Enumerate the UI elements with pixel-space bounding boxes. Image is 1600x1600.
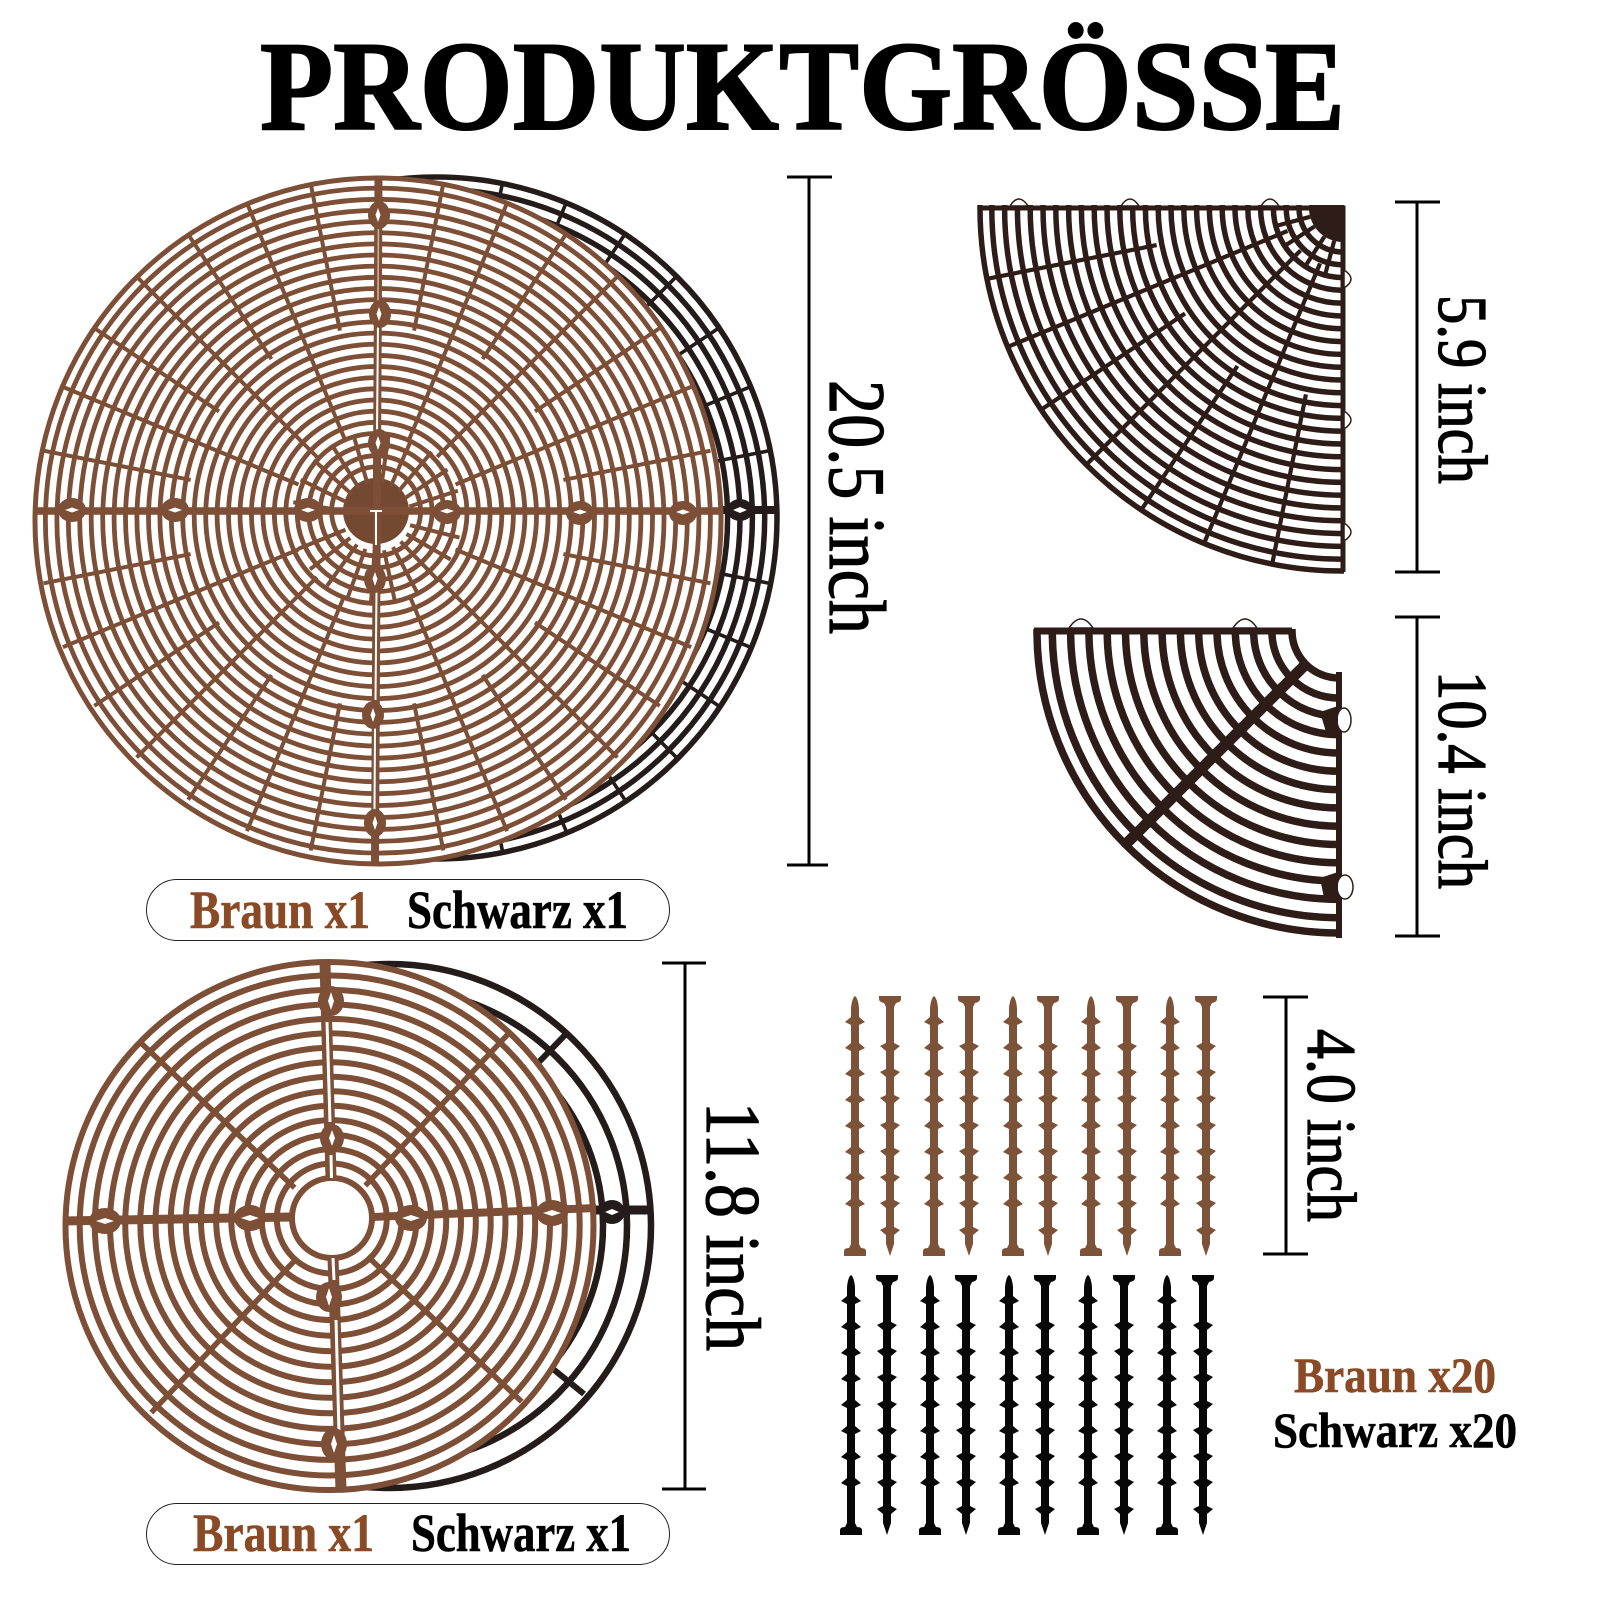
black stakes bbox=[840, 1275, 1214, 1535]
brown small disc spokes bbox=[140, 1031, 522, 1413]
pill: small disc quantities: Braun x1 bbox=[193, 1503, 374, 1563]
tabs of wide corner piece bbox=[1069, 619, 1353, 904]
stake quantities: Braun x20 bbox=[1294, 1347, 1496, 1403]
panel: corner piece with fine grid bbox=[977, 198, 1352, 574]
dimension: 4.0 inch bbox=[1263, 997, 1369, 1254]
dimension: 4.0 inch: 4.0 inch bbox=[1292, 1029, 1369, 1222]
pill: small disc quantities: Schwarz x1 bbox=[411, 1503, 631, 1563]
black small disc bbox=[127, 964, 653, 1488]
dimension: 20.5 inch: 20.5 inch bbox=[812, 380, 900, 634]
dimension: 10.4 inch: 10.4 inch bbox=[1423, 671, 1500, 889]
brown large disc spokes bbox=[44, 184, 710, 850]
dimension: 11.8 inch bbox=[662, 963, 776, 1489]
dimension: 5.9 inch: 5.9 inch bbox=[1423, 295, 1500, 484]
dimension: 5.9 inch bbox=[1395, 202, 1500, 572]
pill: large disc quantities bbox=[146, 880, 670, 940]
brown small disc bbox=[63, 961, 596, 1491]
stake quantities: Schwarz x20 bbox=[1273, 1402, 1517, 1458]
brown large disc bbox=[34, 177, 723, 865]
panel: corner piece with wide grid bbox=[1033, 618, 1354, 938]
dimension: 11.8 inch: 11.8 inch bbox=[690, 1102, 776, 1351]
tabs of corner piece bbox=[1010, 199, 1351, 541]
dimension: 10.4 inch bbox=[1395, 617, 1500, 936]
pill: small disc quantities bbox=[146, 1503, 670, 1564]
black large disc bbox=[95, 177, 778, 859]
panel: large grid discs bbox=[34, 177, 778, 865]
panel: small grid discs bbox=[63, 961, 653, 1491]
brown small disc tabs bbox=[89, 986, 568, 1460]
brown stakes bbox=[844, 996, 1217, 1256]
stake quantities bbox=[1273, 1347, 1517, 1458]
brown large disc rings bbox=[35, 178, 721, 864]
dimension: 20.5 inch bbox=[787, 177, 900, 865]
brown large disc cross bars and seam bbox=[34, 178, 723, 864]
title: PRODUKTGRÖSSE bbox=[260, 17, 1345, 157]
pill: large disc quantities: Schwarz x1 bbox=[407, 880, 628, 940]
brown large disc tabs bbox=[58, 201, 697, 837]
brown small disc rings bbox=[66, 962, 594, 1490]
pill: large disc quantities: Braun x1 bbox=[190, 880, 370, 940]
brown small disc cross bars and seams bbox=[63, 963, 596, 1489]
